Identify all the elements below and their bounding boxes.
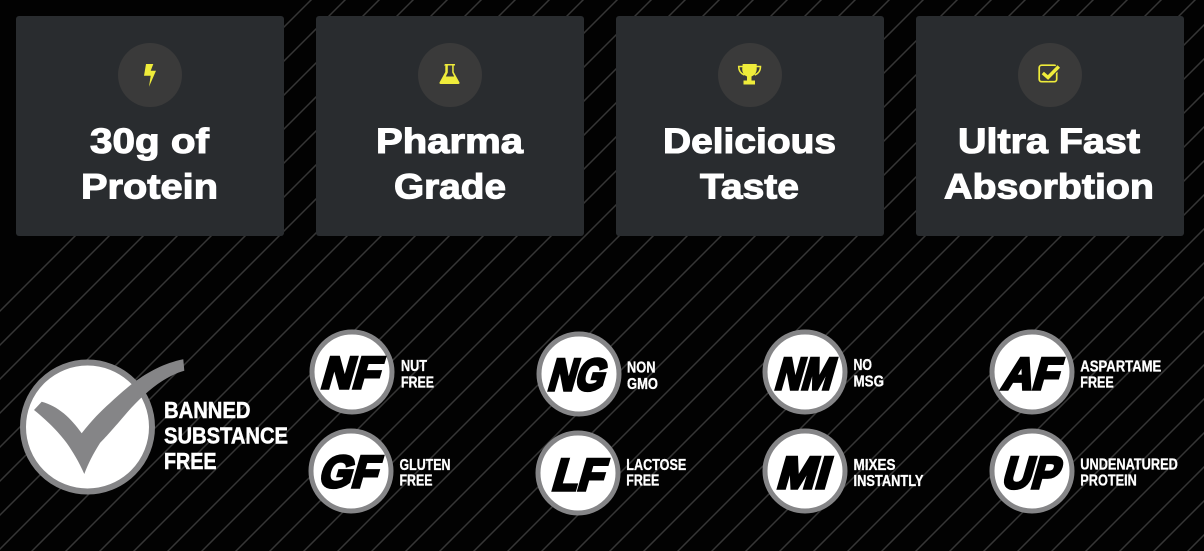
panel: 30g of Protein bbox=[16, 16, 284, 236]
label: non gmo: NON bbox=[627, 360, 656, 377]
panel: Delicious Taste bbox=[616, 16, 884, 236]
label: banned substance free: SUBSTANCE bbox=[164, 422, 288, 448]
label: no msg: NO bbox=[854, 357, 872, 374]
badge: no msg bbox=[765, 332, 884, 412]
icon: trophy bbox=[739, 64, 760, 84]
label: lactose free: LACTOSE bbox=[626, 457, 687, 474]
label: nut free: NUT bbox=[401, 358, 427, 375]
panel: Pharma Grade bbox=[316, 16, 584, 236]
label: banned substance free: FREE bbox=[164, 448, 216, 474]
badge: lactose free: LF bbox=[548, 450, 613, 500]
heading: Ultra Fast Absorbtion: Absorbtion bbox=[944, 166, 1154, 206]
heading: Delicious Taste: Taste bbox=[700, 166, 799, 206]
badge: mixes instantly bbox=[765, 431, 924, 511]
label: aspartame free: ASPARTAME bbox=[1080, 359, 1162, 376]
badge: lactose free bbox=[538, 433, 687, 513]
label: non gmo: GMO bbox=[627, 376, 658, 393]
panel: Ultra Fast Absorbtion bbox=[916, 16, 1184, 236]
label: lactose free: FREE bbox=[626, 473, 660, 490]
label: nut free: FREE bbox=[401, 374, 434, 392]
label: banned substance free: BANNED bbox=[164, 397, 250, 423]
badge: mixes instantly: MI bbox=[773, 448, 838, 498]
heading: 30g of Protein: Protein bbox=[81, 166, 218, 206]
badge: non gmo: NG bbox=[544, 350, 614, 400]
badge: gluten free bbox=[311, 431, 450, 511]
icon: check mark bbox=[34, 359, 184, 474]
badge: no msg: NM bbox=[771, 349, 842, 399]
badge: undenatured protein: UP bbox=[998, 448, 1068, 498]
label: gluten free: GLUTEN bbox=[400, 457, 450, 474]
label: undenatured protein: UNDENATURED bbox=[1080, 456, 1178, 473]
label: gluten free: FREE bbox=[400, 473, 433, 490]
heading: Pharma Grade: Pharma bbox=[376, 121, 523, 161]
icon: flask bbox=[439, 64, 460, 84]
icon: checkbox bbox=[1039, 65, 1059, 82]
badge: undenatured protein bbox=[992, 431, 1178, 511]
badge: banned substance free bbox=[23, 359, 288, 492]
icon: lightning bolt bbox=[144, 64, 156, 87]
heading: Pharma Grade: Grade bbox=[394, 166, 506, 206]
label: mixes instantly: INSTANTLY bbox=[854, 473, 924, 490]
badge: nut free: NF bbox=[317, 348, 389, 398]
heading: Delicious Taste: Delicious bbox=[663, 121, 836, 161]
label: undenatured protein: PROTEIN bbox=[1080, 473, 1137, 490]
label: aspartame free: FREE bbox=[1080, 375, 1114, 392]
badge: non gmo bbox=[539, 334, 658, 414]
heading: 30g of Protein: 30g of bbox=[90, 121, 209, 161]
badge: aspartame free: AF bbox=[998, 349, 1068, 399]
label: no msg: MSG bbox=[854, 374, 884, 391]
heading: Ultra Fast Absorbtion: Ultra Fast bbox=[958, 121, 1140, 161]
badge: aspartame free bbox=[992, 332, 1162, 412]
badge: nut free bbox=[312, 332, 434, 412]
badge: gluten free: GF bbox=[315, 447, 387, 497]
label: mixes instantly: MIXES bbox=[854, 457, 896, 474]
